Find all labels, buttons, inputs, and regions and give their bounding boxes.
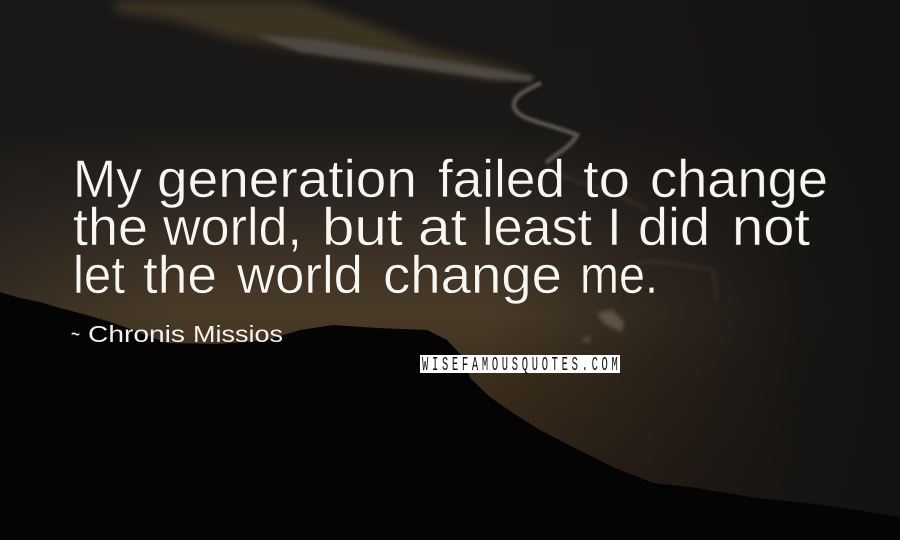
author attribution: Chronis (88, 321, 185, 347)
quote text: change (650, 150, 828, 209)
quote text: world, (162, 198, 302, 257)
author attribution: ~ (71, 321, 80, 347)
quote text: change (383, 246, 562, 305)
quote text: me. (580, 246, 658, 305)
author attribution: Missios (193, 321, 283, 347)
quote text: to (583, 150, 630, 209)
lit cloud streak (115, 0, 647, 210)
author attribution (71, 321, 283, 347)
watermark logo: WISEFAMOUSQUOTES.COM (422, 354, 618, 376)
quote text: world (236, 246, 363, 305)
quote text: I (607, 198, 622, 257)
quote text: My (73, 150, 142, 209)
lit cloud fragments (580, 261, 717, 343)
quote text: generation (157, 150, 417, 209)
quote text (73, 150, 828, 305)
quote text: least (482, 198, 592, 257)
quote text: the (73, 198, 148, 257)
quote text: did (638, 198, 710, 257)
quote text: but (322, 198, 403, 257)
quote text: failed (438, 150, 565, 209)
quote text: the (143, 246, 217, 305)
mountain silhouette (0, 292, 900, 540)
quote text: not (732, 198, 810, 257)
quote text: let (73, 246, 125, 305)
quote text: at (418, 198, 467, 257)
